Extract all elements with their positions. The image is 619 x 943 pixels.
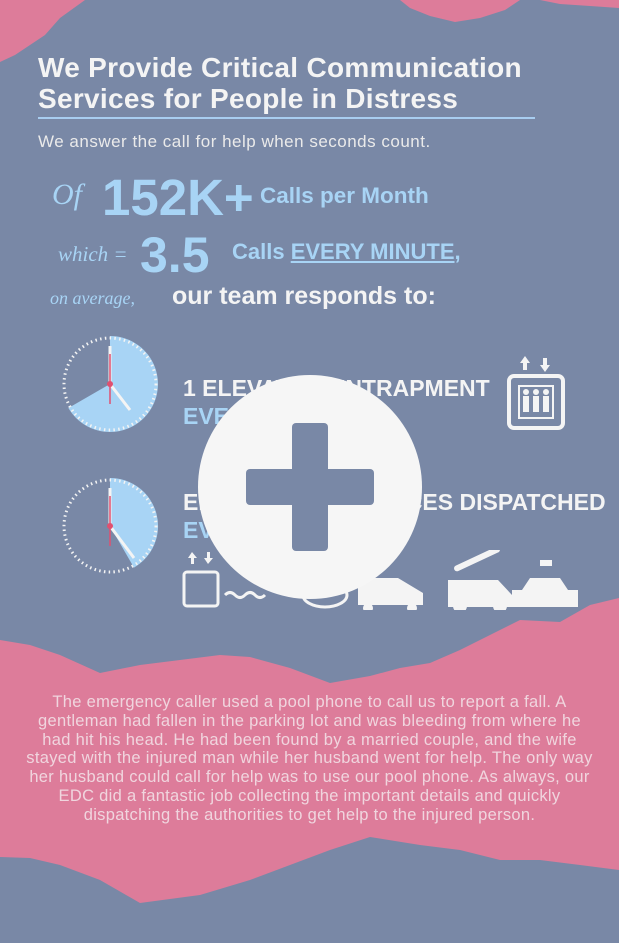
icon: clock 2 [62, 478, 158, 574]
story text: stayed with the injured man while her husband went for help. The only way [26, 749, 593, 767]
story text: her husband could call for help was to use our pool phone. As always, our [29, 768, 590, 786]
story text: dispatching the authorities to get help to the injured person. [84, 806, 535, 824]
text: our team responds to [50, 282, 436, 310]
story text: had hit his head. He had been found by a married couple, and the wife [42, 731, 577, 749]
story text: gentleman had fallen in the parking lot and was bleeding from where he [38, 712, 581, 730]
story text [26, 693, 593, 824]
stat: 152K calls per month: Of [52, 178, 82, 211]
stat: 152K calls per month: 152K+ [102, 169, 254, 226]
icon: clock 1 [62, 336, 158, 432]
icon: elevator [507, 356, 565, 430]
stat: 152K calls per month [52, 169, 429, 226]
stat: 3.5 calls every minute: Calls EVERY MINUTE, [232, 239, 461, 264]
stat: emergency services dispatched: EVERY 3 MIN [183, 517, 327, 543]
icons: services row [182, 550, 578, 610]
stat: 3.5 calls every minute [58, 227, 461, 283]
title [38, 52, 535, 119]
stat: emergency services dispatched [183, 489, 606, 543]
story text: The emergency caller used a pool phone to call us to report a fall. A [52, 693, 567, 711]
stat: 3.5 calls every minute: 3.5 [140, 227, 210, 283]
stat: elevator entrapment: 1 ELEVATOR ENTRAPMENT [183, 375, 490, 401]
icon: play/plus overlay [198, 375, 422, 599]
stat: elevator entrapment [183, 375, 490, 429]
stat: 152K calls per month: Calls per Month [260, 183, 429, 208]
title: Services for People in Distress [38, 83, 458, 114]
title: We Provide Critical Communication [38, 52, 522, 83]
text: our team responds to: our team responds to: [172, 282, 436, 310]
stat: emergency services dispatched: EMERGENCY SERVICES DISPATCHED [183, 489, 606, 515]
text: our team responds to: on average, [50, 288, 135, 308]
stat: elevator entrapment: EVERY 3 HOURS [183, 403, 368, 429]
stat: 3.5 calls every minute: which = [58, 242, 128, 266]
story text: EDC did a fantastic job collecting the important details and quickly [59, 787, 560, 805]
subtitle: We answer the call for help when seconds count. [38, 132, 431, 151]
